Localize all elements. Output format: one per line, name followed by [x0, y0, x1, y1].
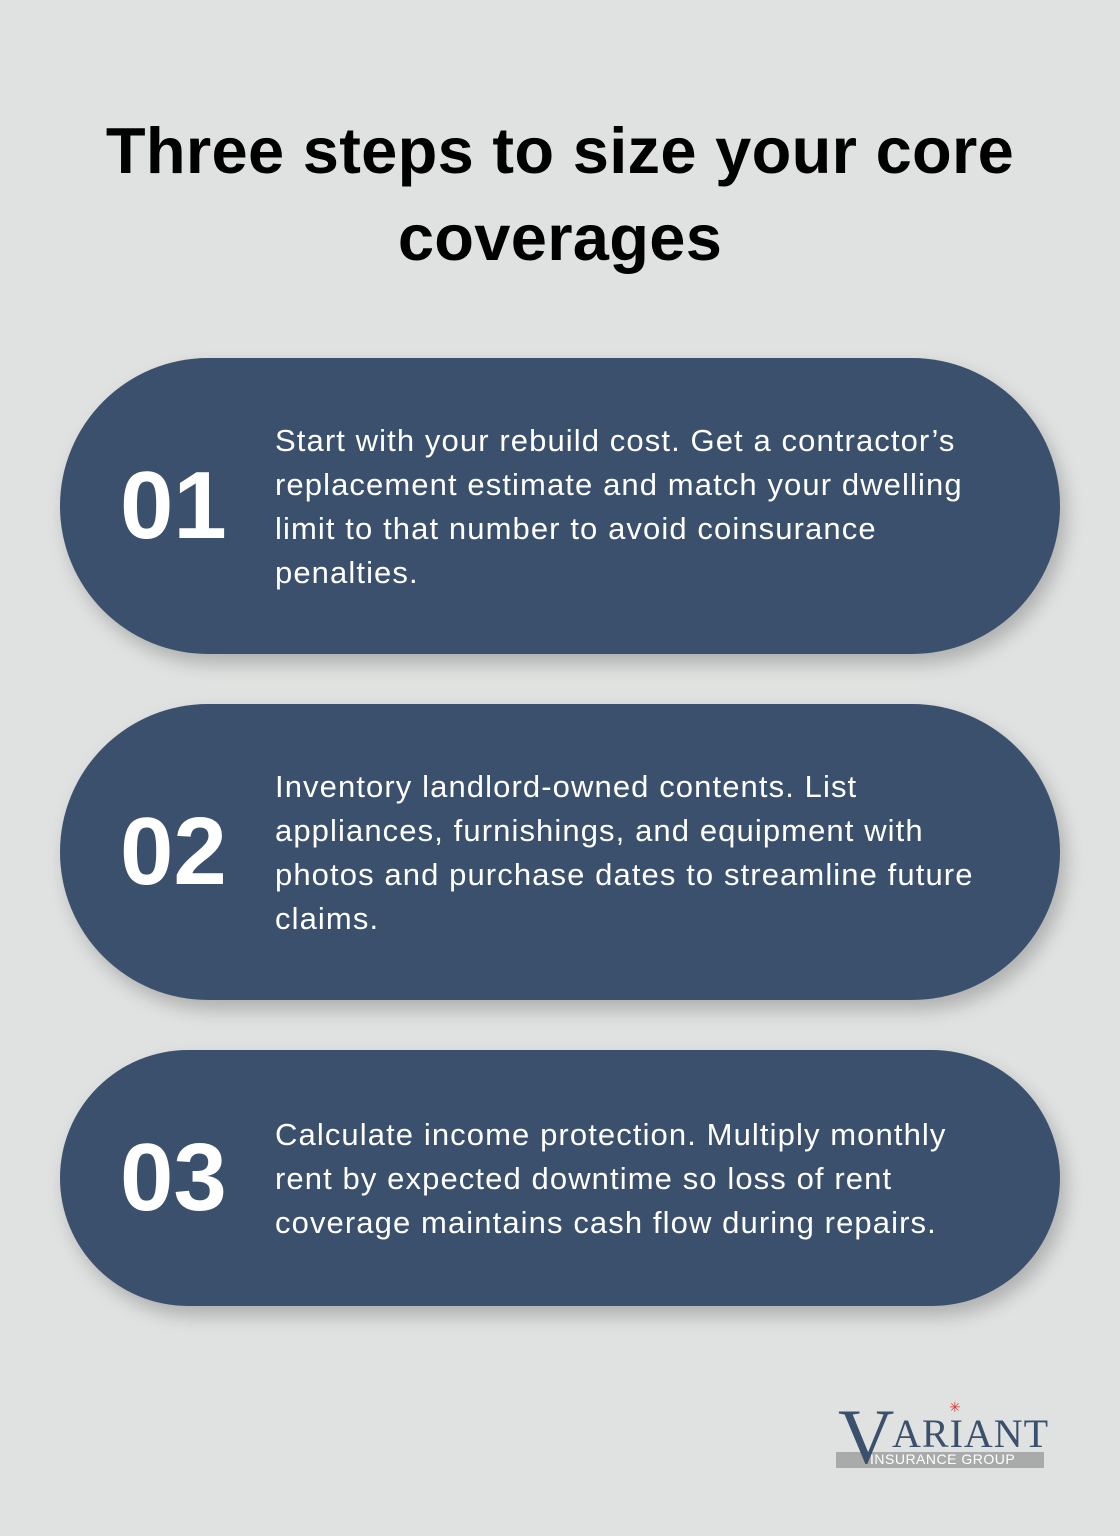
text step 1: limit to that number to avoid coinsurance: [275, 511, 877, 546]
text step 1: penalties.: [275, 555, 419, 590]
title: coverages: [398, 201, 722, 274]
panel: step 1: [60, 358, 1060, 654]
title: Three steps to size your core: [106, 114, 1014, 187]
text step 3: [275, 1117, 946, 1240]
logo: ARIANT: [892, 1411, 1049, 1456]
panel: step 2: [60, 704, 1060, 1000]
number 01: 01: [120, 452, 227, 559]
panel: step 3: [60, 1050, 1060, 1306]
logo: INSURANCE GROUP: [870, 1451, 1015, 1467]
text step 2: Inventory landlord-owned contents. List: [275, 769, 857, 804]
text step 3: Calculate income protection. Multiply monthly: [275, 1117, 946, 1152]
logo: V: [838, 1393, 894, 1480]
logo: ✳: [949, 1399, 961, 1415]
logo: [836, 1393, 1049, 1480]
text step 2: photos and purchase dates to streamline future: [275, 857, 974, 892]
number 02: 02: [120, 798, 227, 905]
text step 2: appliances, furnishings, and equipment with: [275, 813, 924, 848]
title: [106, 114, 1014, 274]
number 03: 03: [120, 1124, 227, 1231]
text step 2: [275, 769, 974, 936]
text step 2: claims.: [275, 901, 379, 936]
text step 1: Start with your rebuild cost. Get a contractor’s: [275, 423, 956, 458]
text step 1: [275, 423, 963, 590]
text step 1: replacement estimate and match your dwelling: [275, 467, 963, 502]
text step 3: rent by expected downtime so loss of rent: [275, 1161, 892, 1196]
text step 3: coverage maintains cash flow during repairs.: [275, 1205, 937, 1240]
